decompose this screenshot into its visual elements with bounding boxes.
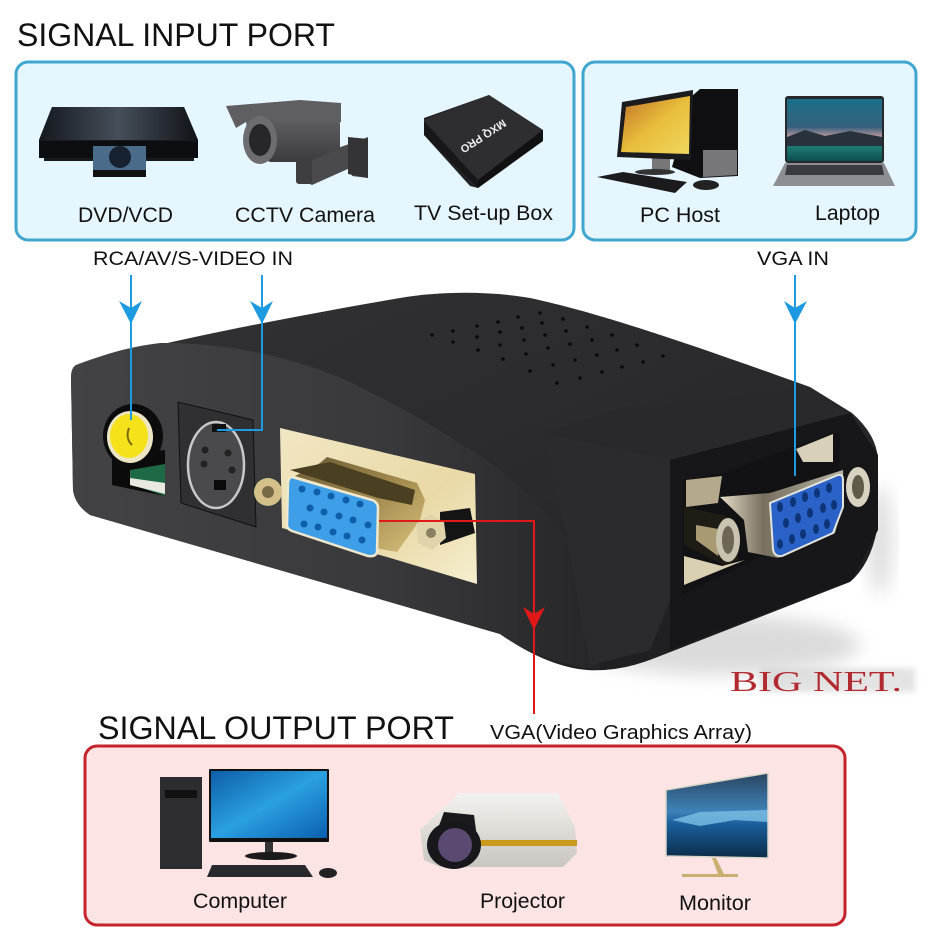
arrow: S-video input (217, 275, 273, 430)
icon: DVD player (39, 107, 198, 177)
label: CCTV Camera: CCTV Camera (235, 204, 375, 227)
label: Computer: Computer (193, 890, 287, 913)
label: VGA IN: VGA IN (757, 249, 829, 270)
port: left VGA output (254, 428, 477, 584)
icon: TV set-up box (424, 95, 543, 188)
watermark: BIG NET (730, 667, 915, 698)
arrow: VGA input (784, 275, 807, 476)
icon: monitor (666, 773, 768, 877)
port: S-video socket (178, 402, 256, 527)
label: Laptop: Laptop (815, 202, 880, 225)
icon: laptop (773, 96, 895, 186)
icon: CCTV camera (226, 100, 368, 185)
port: RCA yellow jack (103, 404, 165, 496)
icon: TV set-up box: MXQ PRO (457, 116, 508, 155)
port: right VGA input (683, 433, 870, 594)
label: RCA/AV/S-VIDEO IN: RCA/AV/S-VIDEO IN (93, 249, 293, 270)
label: DVD/VCD: DVD/VCD (78, 204, 173, 227)
title: signal input port: SIGNAL INPUT PORT (17, 17, 335, 53)
arrow: RCA input (119, 275, 142, 420)
label: VGA (Video Graphics Array): VGA(Video Graphics Array) (490, 722, 752, 744)
label: Projector: Projector (480, 890, 565, 913)
label: TV Set-up Box: TV Set-up Box (414, 202, 554, 225)
icon: desktop computer (160, 769, 337, 878)
speaker holes (430, 311, 665, 385)
device top surface and body (71, 293, 878, 670)
device: video converter box (71, 293, 892, 675)
arrow: VGA output (379, 521, 545, 714)
label: PC Host: PC Host (640, 204, 720, 227)
icon: projector (420, 793, 577, 869)
panel: display outputs (85, 746, 845, 925)
label: Monitor: Monitor (679, 892, 751, 915)
panel: computer sources (583, 62, 916, 240)
raised right housing (543, 388, 850, 460)
watermark: BIG NET: BIG NET. (730, 667, 902, 698)
icon: PC host (597, 89, 738, 193)
panel: video source devices (16, 62, 574, 240)
device front face (71, 343, 600, 669)
title: signal output port: SIGNAL OUTPUT PORT (98, 710, 454, 746)
